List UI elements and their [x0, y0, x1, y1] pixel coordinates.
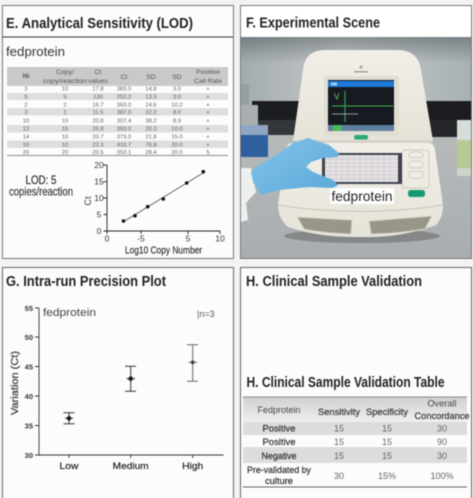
- table: LOD data: 3.0: [173, 86, 181, 92]
- table: clinical validation: Pre-validated by: [247, 465, 311, 475]
- table: LOD data: 3: [24, 110, 28, 116]
- table: LOD data: 17.8: [92, 86, 104, 92]
- table: LOD data: 353.1: [117, 150, 131, 156]
- table: LOD data: 363.0: [117, 102, 131, 108]
- table: LOD data: SD: [146, 74, 156, 81]
- table: clinical validation: Concordance: [414, 411, 470, 421]
- table: LOD data: copy/reaction: [43, 78, 87, 85]
- table: LOD data: +: [206, 102, 210, 108]
- icon: gloved hand: [251, 138, 339, 195]
- table: LOD data: +: [206, 126, 210, 132]
- chart: standard curve: 5: [97, 210, 102, 220]
- table: clinical validation: Fedprotein: [258, 405, 301, 415]
- table: LOD data: 16.7: [92, 102, 104, 108]
- heading: F: F. Experimental Scene: [246, 16, 380, 32]
- chart: standard curve: 15: [94, 176, 104, 186]
- table: clinical validation: 30: [437, 451, 447, 461]
- table: LOD data: 28.4: [145, 150, 157, 156]
- label: fedprotein on instrument: fedprotein: [332, 188, 392, 204]
- table: LOD data: 10.0: [171, 126, 183, 132]
- chart: precision plot: 45: [25, 362, 33, 372]
- data: high: [187, 345, 198, 381]
- table: LOD data: 8.0: [173, 110, 181, 116]
- chart: standard curve: Log10 Copy Number: [125, 244, 202, 256]
- table: LOD data: 3.0: [173, 94, 181, 100]
- instrument: keypad: [402, 150, 429, 188]
- instrument: screen: [328, 80, 394, 131]
- table: LOD data: 76.8: [145, 142, 157, 148]
- table: LOD data: 32.2: [145, 110, 157, 116]
- chart: precision plot: 35: [25, 422, 33, 430]
- table: LOD data: 307.4: [117, 118, 132, 124]
- table: LOD data: +: [206, 134, 210, 140]
- table: LOD data: 8.9: [173, 118, 181, 124]
- table: clinical validation: Overall: [428, 398, 457, 408]
- table: LOD data: 10: [62, 134, 68, 140]
- chart: precision plot: High: [182, 461, 203, 472]
- panel: F experimental scene: [240, 6, 472, 258]
- table: LOD data: +: [206, 110, 210, 116]
- chart: precision plot: 30: [25, 451, 33, 460]
- table: LOD data: 12: [23, 126, 29, 132]
- table: LOD data: 20: [62, 150, 68, 156]
- table: LOD data: 2: [63, 102, 67, 108]
- label: fedprotein: fedprotein: [6, 44, 65, 59]
- table: LOD data: 373.0: [117, 134, 131, 140]
- table: LOD data: 10: [62, 142, 68, 148]
- chart: standard curve: 0: [97, 226, 102, 236]
- chart: precision plot: 40: [25, 392, 33, 401]
- table: LOD data: +: [206, 118, 210, 124]
- table: LOD data: values: [88, 78, 108, 85]
- table: LOD data: 252.2: [117, 94, 131, 100]
- table: clinical validation: Negative: [262, 451, 296, 461]
- table: clinical validation: Positive: [262, 437, 296, 447]
- chart: precision plot: |n=3: [197, 309, 215, 319]
- chart: precision plot: 55: [25, 304, 33, 313]
- table: LOD data: SD: [172, 74, 182, 81]
- table: clinical validation: Positive: [262, 424, 296, 434]
- table: LOD data: +: [206, 94, 210, 100]
- chart: precision plot: 50: [25, 333, 33, 342]
- panel: G intra-run precision: [2, 268, 234, 498]
- chart: precision plot: fedprotein: [43, 307, 96, 319]
- chart: standard curve: 0: [105, 234, 110, 244]
- plate: 96-well: [322, 153, 402, 184]
- chart: precision plot: Medium: [113, 461, 149, 472]
- table: LOD data: 38.2: [145, 118, 157, 124]
- table: LOD data: 10: [62, 86, 68, 92]
- table: LOD data: 387.0: [117, 110, 131, 116]
- table: LOD data: 21.8: [145, 134, 157, 140]
- data: medium: [125, 366, 136, 391]
- table: clinical validation: 15: [334, 437, 344, 447]
- table: clinical validation: 100%: [430, 471, 454, 481]
- table: LOD data: 25.8: [92, 126, 104, 132]
- chart: precision plot: [10, 304, 224, 472]
- table: clinical validation: 15: [382, 437, 392, 447]
- instrument: vents: [297, 216, 432, 234]
- table: LOD data: 20: [23, 150, 29, 156]
- table: LOD data: 15: [62, 126, 68, 132]
- table: LOD data: 14.8: [145, 86, 157, 92]
- table: clinical validation: Specificity: [366, 407, 409, 417]
- table: LOD data: 5: [24, 94, 28, 100]
- table: LOD data: 5: [206, 150, 210, 156]
- table: LOD data: 393.0: [117, 126, 131, 132]
- heading: G: G. Intra-run Precision Plot: [6, 274, 166, 290]
- table: clinical validation: 90: [437, 437, 447, 447]
- table: LOD data: 20.5: [92, 150, 104, 156]
- table: LOD data: 20.0: [171, 142, 183, 148]
- chart: precision plot: Low: [60, 461, 79, 472]
- table: LOD data: Ni: [23, 73, 30, 80]
- panel: E analytical sensitivity: [2, 6, 234, 258]
- icon: reagent rack: [457, 120, 471, 176]
- table: LOD data: 383.0: [117, 86, 131, 92]
- panel: H clinical sample validation: [240, 268, 472, 498]
- table: LOD data: 22.3: [92, 142, 104, 148]
- chart: standard curve: 20: [94, 160, 104, 170]
- table: LOD data: 10.2: [171, 102, 183, 108]
- table: LOD data: 410.7: [117, 142, 131, 148]
- table: LOD data: +: [206, 142, 210, 148]
- table: LOD data: Call Rate: [194, 78, 222, 85]
- chart: standard curve: Ct: [83, 196, 94, 206]
- table: clinical validation: 30: [334, 471, 344, 481]
- table: LOD data: 130: [93, 94, 103, 100]
- table: LOD data: 20.8: [92, 118, 104, 124]
- photo: thermal cycler on bench: [241, 37, 471, 258]
- table: clinical validation: 15: [382, 424, 392, 434]
- table: LOD data: 3: [24, 86, 28, 92]
- table: clinical validation: 15%: [378, 471, 396, 481]
- table: LOD data: Copy/: [56, 69, 74, 76]
- data: low: [64, 413, 74, 424]
- table: LOD data: 20.3: [145, 126, 157, 132]
- callout: LOD value: copies/reaction: [9, 184, 73, 198]
- callout: LOD value: [9, 173, 73, 198]
- instrument: upper housing: [293, 50, 433, 141]
- table: LOD data: [7, 67, 228, 156]
- table: clinical validation: 15: [334, 451, 344, 461]
- icon: blue tip box: [241, 125, 268, 157]
- chart: standard curve: -5: [137, 234, 145, 244]
- table: LOD data: Ct: [121, 74, 128, 81]
- table: clinical validation: culture: [265, 476, 293, 486]
- table: LOD data: 10: [62, 118, 68, 124]
- table: LOD data: Positive: [196, 69, 220, 76]
- table: clinical validation: 15: [334, 424, 344, 434]
- table: LOD data: 14: [23, 134, 30, 140]
- table: clinical validation: 30: [437, 424, 447, 434]
- callout: LOD value: LOD: 5: [26, 173, 57, 187]
- table: LOD data: 16: [23, 142, 29, 148]
- chart: precision plot: Variation (Ct): [10, 351, 21, 415]
- table: LOD data: 2: [24, 102, 28, 108]
- table: LOD data: 14.6: [145, 102, 157, 108]
- chart: standard curve: 5: [186, 234, 191, 244]
- table: clinical validation: [243, 397, 470, 487]
- heading: H: H. Clinical Sample Validation: [246, 274, 422, 290]
- instrument: lower base: [278, 143, 443, 237]
- chart: standard curve: 10: [215, 234, 225, 244]
- table: clinical validation: Sensitivity: [318, 407, 361, 417]
- table: LOD data: 1: [63, 110, 67, 116]
- table: LOD data: 20.0: [171, 150, 183, 156]
- table: clinical validation: 15: [382, 451, 392, 461]
- chart: standard curve: 10: [94, 193, 104, 203]
- table: LOD data: 5: [63, 94, 67, 100]
- icon: lab coat sleeve: [241, 168, 256, 222]
- table: LOD data: 13.3: [145, 94, 157, 100]
- chart: standard curve: [83, 160, 225, 256]
- table: LOD data: +: [206, 86, 210, 92]
- table: LOD data: 10: [23, 118, 29, 124]
- table: LOD data: 15.0: [171, 134, 183, 140]
- heading: E: E. Analytical Sensitivity (LOD): [6, 16, 193, 32]
- table: LOD data: Ct: [95, 69, 102, 76]
- table: LOD data: 20.7: [92, 134, 104, 140]
- table: LOD data: 11.5: [93, 110, 103, 116]
